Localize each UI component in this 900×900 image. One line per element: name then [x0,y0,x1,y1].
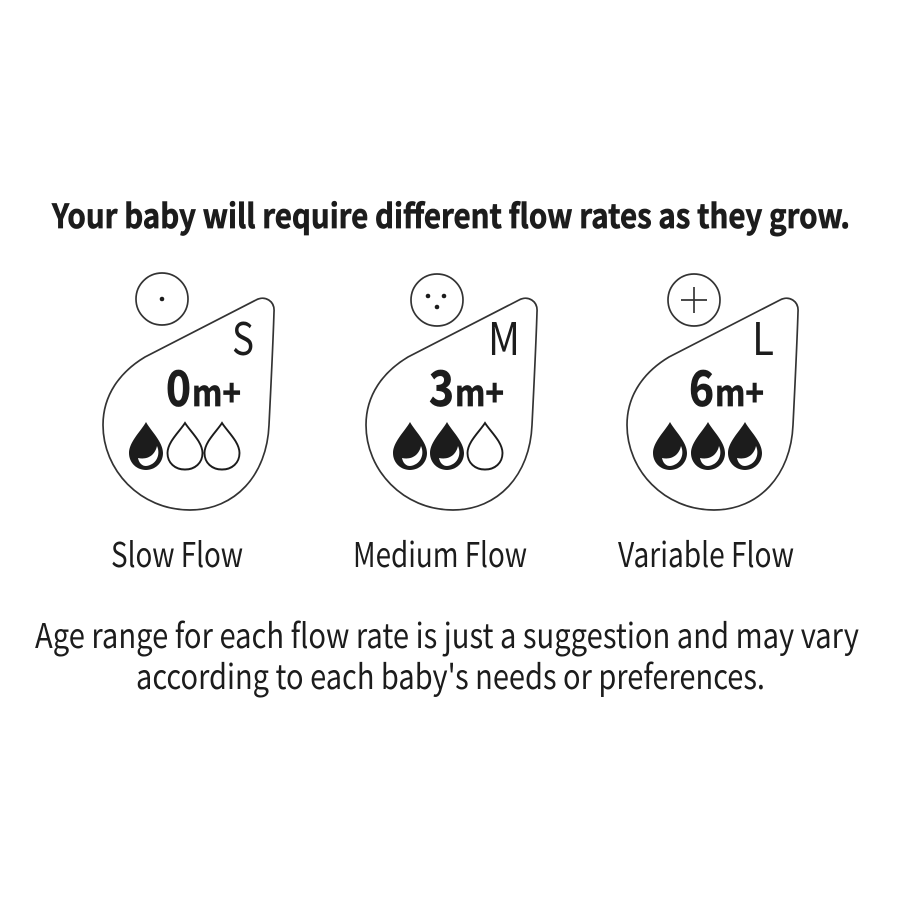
age label 6m+: 6 [689,350,714,421]
teardrop badge: L [627,298,798,510]
panel: medium flow [353,274,537,577]
caption: Medium Flow: Medium Flow [353,528,527,577]
age label 3m+: m+ [455,365,504,417]
age label 3m+: 3 [429,350,454,421]
size letter M: M [488,303,520,368]
caption: Variable Flow: Variable Flow [618,528,794,577]
teardrop badge: M [366,298,537,510]
age label 6m+: m+ [715,365,764,417]
icon: single-hole nipple circle [136,273,188,325]
panel: variable flow [618,274,798,577]
age label 0m+: m+ [192,365,241,417]
age label 0m+: 0 [166,350,191,421]
flow drops: three of three filled [653,422,762,470]
footnote [35,609,859,699]
age label 0m+ [166,350,241,421]
caption: Slow Flow: Slow Flow [111,528,243,577]
age label 6m+ [689,350,764,421]
panel: slow flow [103,273,274,577]
flow drops: one of three filled [129,422,240,470]
size letter S: S [232,303,254,368]
flow drops: two of three filled [393,422,502,470]
size letter L: L [752,303,774,368]
icon: cross-cut nipple circle [668,274,720,326]
teardrop badge: S [103,298,274,510]
footnote: according to each baby's needs or preferences. [136,650,765,699]
icon: three-hole nipple circle [411,274,463,326]
age label 3m+ [429,350,504,421]
